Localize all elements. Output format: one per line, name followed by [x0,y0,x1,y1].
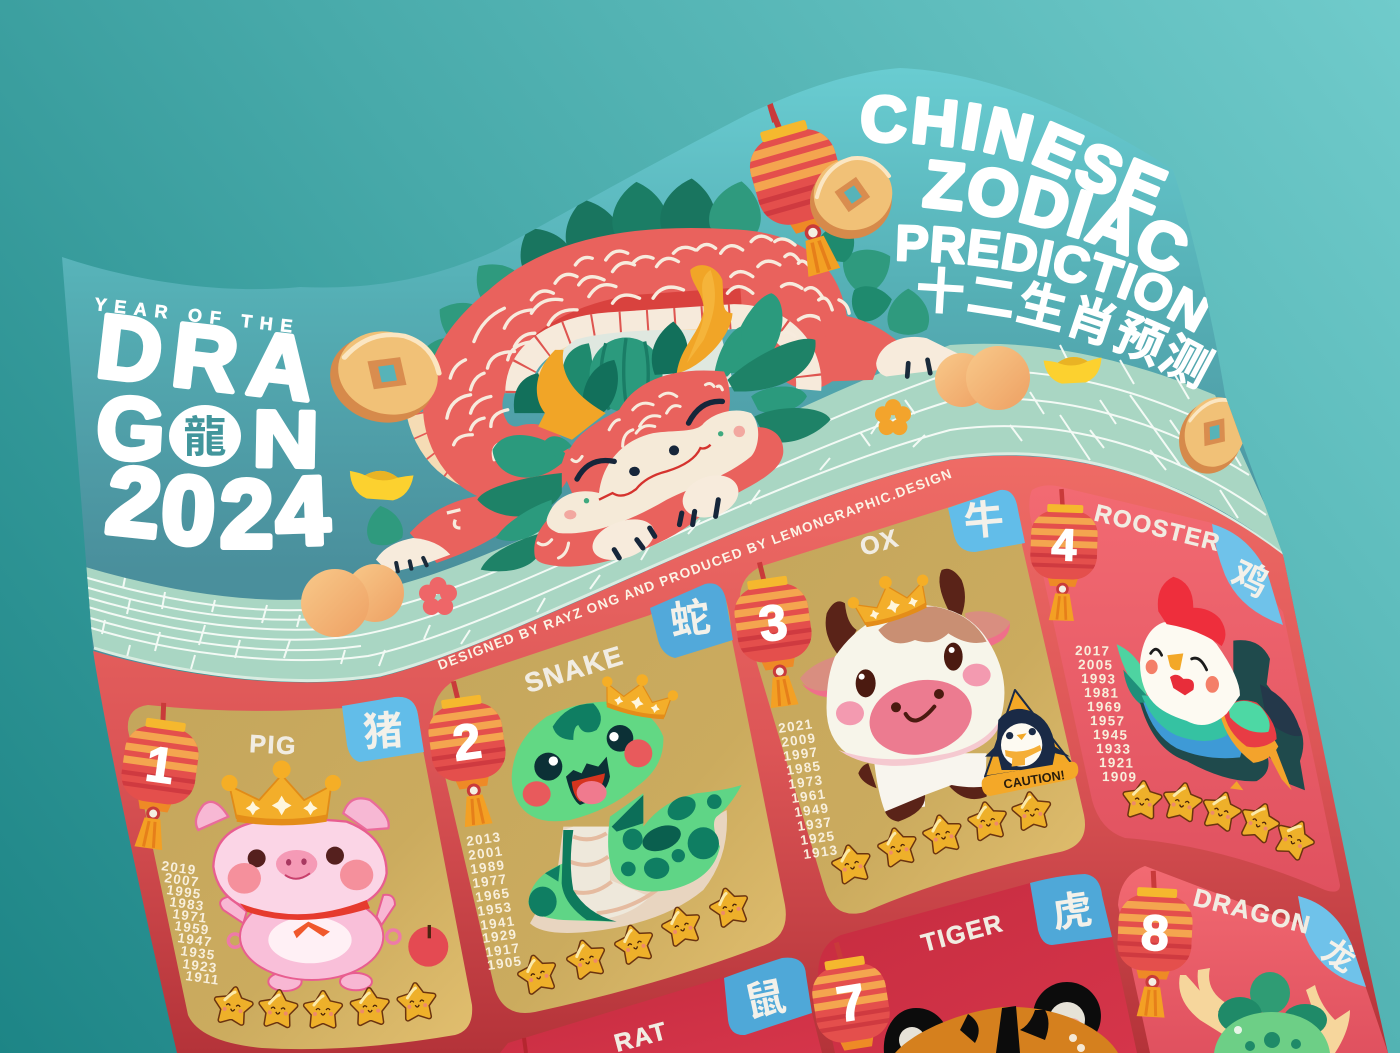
lantern 2: 2 [449,712,485,772]
icon: oranges right [935,346,1030,410]
panel: brick wall band [82,344,1290,680]
years: snake: 1977 [471,871,508,891]
title: 2024: 2 [220,461,273,568]
lantern 1: 1 [142,735,178,795]
years: pig: 1971 [172,906,209,926]
years: rooster [1075,643,1137,785]
illustration: snake [512,666,742,933]
years: snake: 1905 [486,953,523,973]
icon: dragon character circle [169,405,241,467]
panel: pig [128,697,472,1049]
title: prediction: PREDICTION [896,224,1208,333]
label: snake name: SNAKE [521,640,627,699]
years: pig: 1959 [174,918,211,938]
years: ox: 2021 [777,716,814,736]
lantern 3 [725,556,824,712]
illustration: dragon character [1179,968,1350,1053]
panel: rat [500,958,822,1053]
years: snake: 1953 [476,899,513,919]
inner belly ring [518,317,809,393]
years: rooster: 1921 [1099,755,1134,771]
tab: rat character [724,958,812,1035]
title: chinese characters: 十二生肖预测 [918,266,1217,390]
illustration: pig [196,761,448,991]
icon: coin left [320,319,447,435]
years: pig: 2019 [161,858,198,878]
lantern 7 [802,936,898,1053]
lantern 2 [419,675,518,831]
right rear leg [819,313,900,381]
lower belly band [416,413,514,484]
tab: rooster character [1212,524,1283,625]
years: snake: 2013 [465,829,502,849]
years: rooster: 1957 [1090,713,1125,729]
years: ox: 1925 [799,828,836,848]
scales [447,236,856,460]
left front leg [376,493,518,573]
years: snake [466,832,521,970]
title: n: N [252,395,320,485]
years: pig: 1923 [182,956,219,976]
stars: pig rating [214,983,436,1026]
label: ox name: OX [857,524,902,562]
label: tiger name: TIGER [918,909,1007,958]
years: pig: 1947 [177,930,214,950]
icon: flower red [419,577,457,615]
back leaves [363,176,929,548]
title: 2024 [102,446,331,568]
tab: pig character: 猪 [362,709,405,755]
title: g: G [94,377,168,480]
years: rooster: 1933 [1096,741,1131,757]
years: snake: 1965 [474,885,511,905]
years: rooster: 1993 [1081,671,1116,687]
tab: dragon character [1298,896,1366,987]
tab: dragon character: 龙 [1316,932,1362,979]
title: 2024: 4 [274,457,331,566]
icon: big lantern [730,87,870,285]
icon: oranges left [301,564,404,637]
illustration: big dragon [363,176,961,573]
tab: rat character: 鼠 [741,975,789,1026]
mane leaves behind head [514,322,734,413]
years: rooster: 1945 [1093,727,1128,743]
title: dra: DRA [92,297,330,422]
icon: coin right edge [1170,388,1254,482]
tab: ox character [948,490,1025,552]
years: rooster: 1969 [1087,699,1122,715]
years: snake: 1941 [479,913,516,933]
tab: snake character [650,583,733,658]
panel: snake [433,583,786,1013]
icon: flower orange [875,399,911,435]
title: 2024: 2 [102,446,166,558]
icon: coin over lantern [803,152,899,245]
lantern 1 [109,698,208,854]
years: ox: 1985 [785,758,822,778]
lantern 7: 7 [833,973,869,1033]
label: dragon name: DRAGON [1191,884,1314,940]
years: snake: 2001 [467,843,504,863]
illustration: tiger [884,982,1118,1053]
years: ox: 2009 [780,730,817,750]
lantern 8: 8 [1140,904,1170,962]
tab: pig character [342,697,424,762]
years: pig: 1935 [180,943,217,963]
lantern 4 [1025,488,1102,622]
coiled body [463,267,809,466]
years: rooster: 1909 [1102,769,1137,785]
panel: tiger [818,874,1137,1053]
icon: gold ingot right [1043,355,1103,384]
years: pig: 1983 [169,894,206,914]
stars: snake rating [517,886,750,994]
years: ox: 1997 [782,744,819,764]
years: pig: 2007 [164,870,201,890]
illustration: rooster [1117,577,1305,790]
panel: rooster [1029,485,1340,892]
credit line: DESIGNED BY RAYZ ONG AND PRODUCED BY LEMONGRAPHIC.DESIGN [436,466,955,673]
title: year of the: YEAR OF THE [94,294,301,337]
lantern 3: 3 [755,593,791,653]
years: ox: 1937 [796,814,833,834]
years: snake: 1989 [469,857,506,877]
icon: penguin caution sign: CAUTION! [1003,768,1066,792]
horns [537,265,733,440]
tab: snake character: 蛇 [667,596,713,645]
icon: penguin caution sign [982,690,1078,796]
side leaves [477,293,831,571]
years: ox [777,716,839,862]
tab: tiger character [1030,874,1112,945]
panel: dragon [1118,866,1388,1053]
lantern 8 [1111,869,1198,1019]
title: 2024: 0 [159,456,218,566]
lantern string: rat [524,1038,526,1053]
stars: ox rating [832,792,1051,883]
years: rooster: 1981 [1084,685,1119,701]
years: ox: 1961 [790,786,827,806]
panel: red lower section [90,456,1400,1053]
tab: tiger character: 虎 [1049,888,1095,937]
years: pig: 1911 [185,968,221,988]
lantern 4: 4 [1051,519,1077,571]
years: rooster: 2005 [1078,657,1113,673]
years: snake: 1917 [484,940,521,960]
label: rooster name: ROOSTER [1092,500,1223,557]
title: zodiac: ZODIAC [922,159,1188,272]
years: ox: 1973 [787,772,824,792]
illustration: ox [800,563,1078,822]
title: chinese: CHINESE [861,94,1169,216]
years: ox: 1949 [793,800,830,820]
years: ox: 1913 [802,842,839,862]
panel: ox [740,490,1085,914]
label: pig name: PIG [249,730,298,760]
head [534,370,783,567]
icon: gold ingot left [348,469,414,502]
tab: ox character: 牛 [962,497,1006,545]
icon: dragon character circle: 龍 [184,414,226,462]
right rear paw [876,337,961,376]
front paws [587,468,744,568]
stars: rooster rating [1124,782,1317,860]
tab: rooster character: 鸡 [1225,552,1275,605]
panel: teal header [40,50,1320,670]
years: rooster: 2017 [1075,643,1110,659]
years: snake: 1929 [481,926,518,946]
years: pig [161,858,221,988]
years: pig: 1995 [166,882,203,902]
